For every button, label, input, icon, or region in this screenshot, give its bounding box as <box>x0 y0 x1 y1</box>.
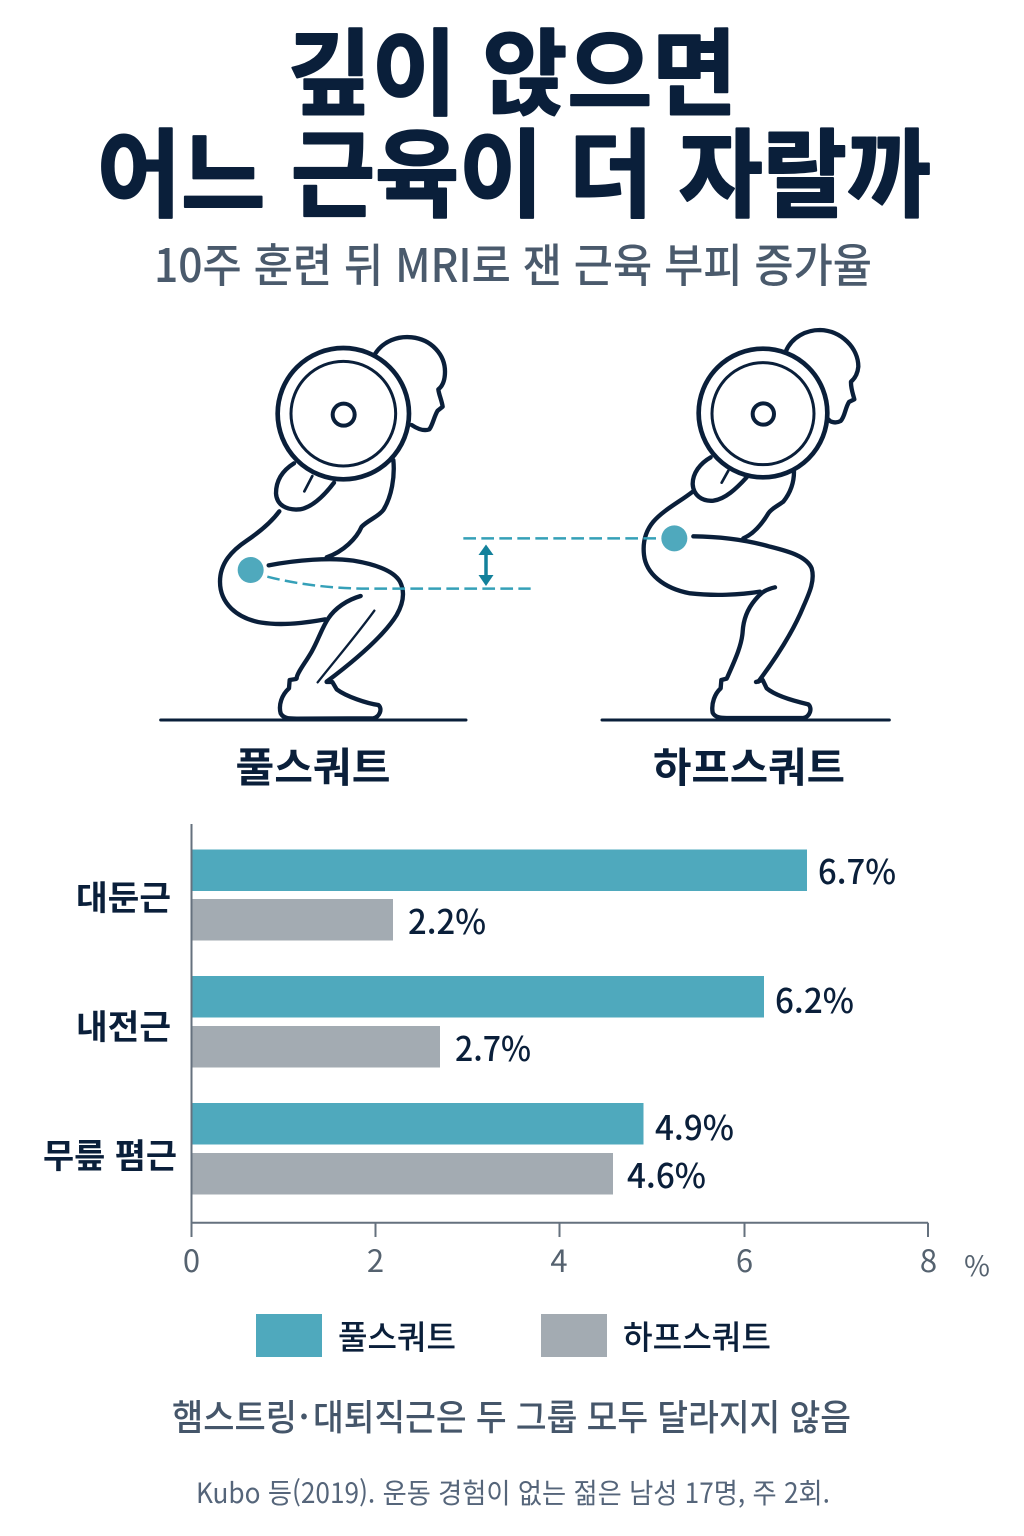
category labels <box>43 871 177 1178</box>
barbell plate <box>278 348 409 479</box>
foot <box>280 679 380 719</box>
axis tick labels: 0 <box>183 1236 200 1281</box>
axis tick labels: 6 <box>736 1236 753 1281</box>
note: 햄스트링 <box>172 1389 297 1441</box>
subtitle: 10주 훈련 뒤 MRI로 잰 근육 부피 증가율 <box>154 230 872 296</box>
label: full squat: 풀스쿼트 <box>236 734 390 794</box>
note: · <box>299 1389 309 1441</box>
illustration: half squat figure <box>463 330 889 720</box>
calf <box>727 587 775 677</box>
calf <box>297 596 361 678</box>
legend: half squat <box>541 1311 771 1359</box>
label: half squat: 하프스쿼트 <box>653 734 845 794</box>
arrow: hip height difference <box>478 544 494 586</box>
ground line <box>602 715 889 724</box>
legend: full squat: 풀스쿼트 <box>338 1311 456 1359</box>
title: 깊이 앉으면 <box>287 0 737 135</box>
thigh <box>269 559 403 682</box>
illustration: full squat figure <box>161 337 531 720</box>
value labels: 2.2% <box>408 895 486 944</box>
value labels: 6.7% <box>818 845 896 894</box>
source: Kubo 등(2019). 운동 경험이 없는 젊은 남성 17명, 주 2회. <box>196 1472 830 1512</box>
legend: half squat: 하프스쿼트 <box>623 1311 771 1359</box>
value labels: 6.2% <box>775 974 854 1023</box>
category labels: 대둔근 <box>76 871 171 920</box>
title: 어느 근육이 더 자랄까 <box>97 98 931 237</box>
bar chart <box>43 824 990 1285</box>
value labels: 2.7% <box>455 1022 531 1071</box>
thigh <box>693 536 813 682</box>
foot <box>712 679 810 718</box>
title <box>97 0 931 237</box>
forearm line <box>304 476 312 491</box>
barbell plate <box>699 349 827 477</box>
axis tick labels: 2 <box>367 1236 384 1281</box>
torso <box>220 460 394 624</box>
bars: 내전근 <box>192 976 764 1068</box>
value labels: 4.9% <box>655 1101 734 1150</box>
axis tick labels: 8 <box>920 1236 937 1281</box>
category labels: 무릎 폄근 <box>43 1129 177 1178</box>
torso <box>644 472 794 595</box>
axes <box>191 824 928 1237</box>
bars: 대둔근 <box>192 850 807 940</box>
legend: full squat <box>256 1311 456 1359</box>
shin line <box>318 611 374 682</box>
head <box>786 330 858 422</box>
forearm line <box>722 471 728 483</box>
axis tick labels: 4 <box>550 1236 568 1281</box>
value labels <box>408 845 896 1198</box>
head <box>375 337 445 430</box>
category labels: 내전근 <box>76 1000 171 1049</box>
hip reference dashed line <box>463 535 657 542</box>
note: 대퇴직근은 두 그룹 모두 달라지지 않음 <box>313 1389 851 1441</box>
axis tick labels <box>183 1236 990 1285</box>
hip dot <box>238 557 264 583</box>
axis tick labels: % <box>964 1245 990 1285</box>
hip dot <box>661 525 687 551</box>
arm <box>276 463 334 510</box>
legend <box>256 1311 771 1359</box>
ground line <box>161 715 466 724</box>
bars: 무릎 폄근 <box>192 1103 644 1194</box>
arm <box>693 457 747 501</box>
femur reference dashed line <box>267 577 531 589</box>
value labels: 4.6% <box>627 1149 706 1198</box>
